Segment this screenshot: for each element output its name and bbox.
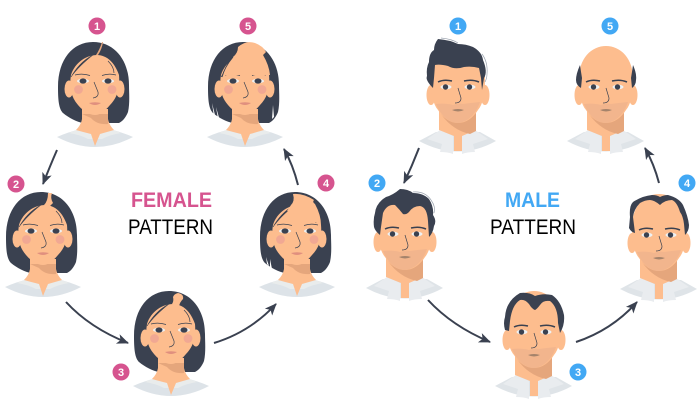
- heading: female pattern: PATTERN: [128, 216, 213, 239]
- badge female 1: 1: [94, 21, 100, 33]
- badge male 4: 4: [684, 178, 691, 190]
- badge male 4: [678, 174, 696, 192]
- female pattern stage 5: [207, 42, 283, 147]
- male pattern stage 5: [567, 46, 644, 154]
- male pattern stage 3: [495, 291, 572, 399]
- female pattern stage 3: [133, 291, 209, 396]
- arrows: male cycle: [404, 148, 659, 342]
- badge female 3: [112, 364, 130, 380]
- badge male 5: [602, 18, 618, 34]
- arrows: female cycle: [43, 149, 298, 343]
- badge male 5: 5: [607, 21, 613, 33]
- female pattern stage 1: [57, 42, 133, 147]
- male pattern stage 1: [419, 38, 496, 154]
- badge female 2: [8, 176, 24, 192]
- heading: female pattern: FEMALE: [131, 189, 212, 212]
- badge male 3: [570, 364, 586, 380]
- badge male 1: [450, 18, 466, 34]
- badge male 2: 2: [374, 178, 380, 190]
- heading: male pattern: MALE: [505, 189, 560, 212]
- female pattern stage 2: [5, 192, 81, 297]
- heading: female pattern: [128, 189, 213, 239]
- badge female 4: 4: [323, 178, 330, 190]
- badge female 5: 5: [245, 21, 251, 33]
- heading: male pattern: PATTERN: [490, 216, 576, 239]
- badge male 1: 1: [455, 21, 461, 33]
- male pattern stage 4: [620, 194, 697, 302]
- female pattern stage 4: [259, 192, 335, 297]
- badge female 2: 2: [13, 179, 19, 191]
- badge female 1: [88, 18, 106, 34]
- badge female 3: 3: [118, 367, 124, 379]
- badge female 4: [318, 174, 334, 192]
- badge female 5: [240, 18, 256, 34]
- badge male 3: 3: [575, 367, 581, 379]
- male pattern stage 2: [366, 189, 443, 301]
- heading: male pattern: [490, 189, 576, 239]
- badge male 2: [368, 174, 386, 192]
